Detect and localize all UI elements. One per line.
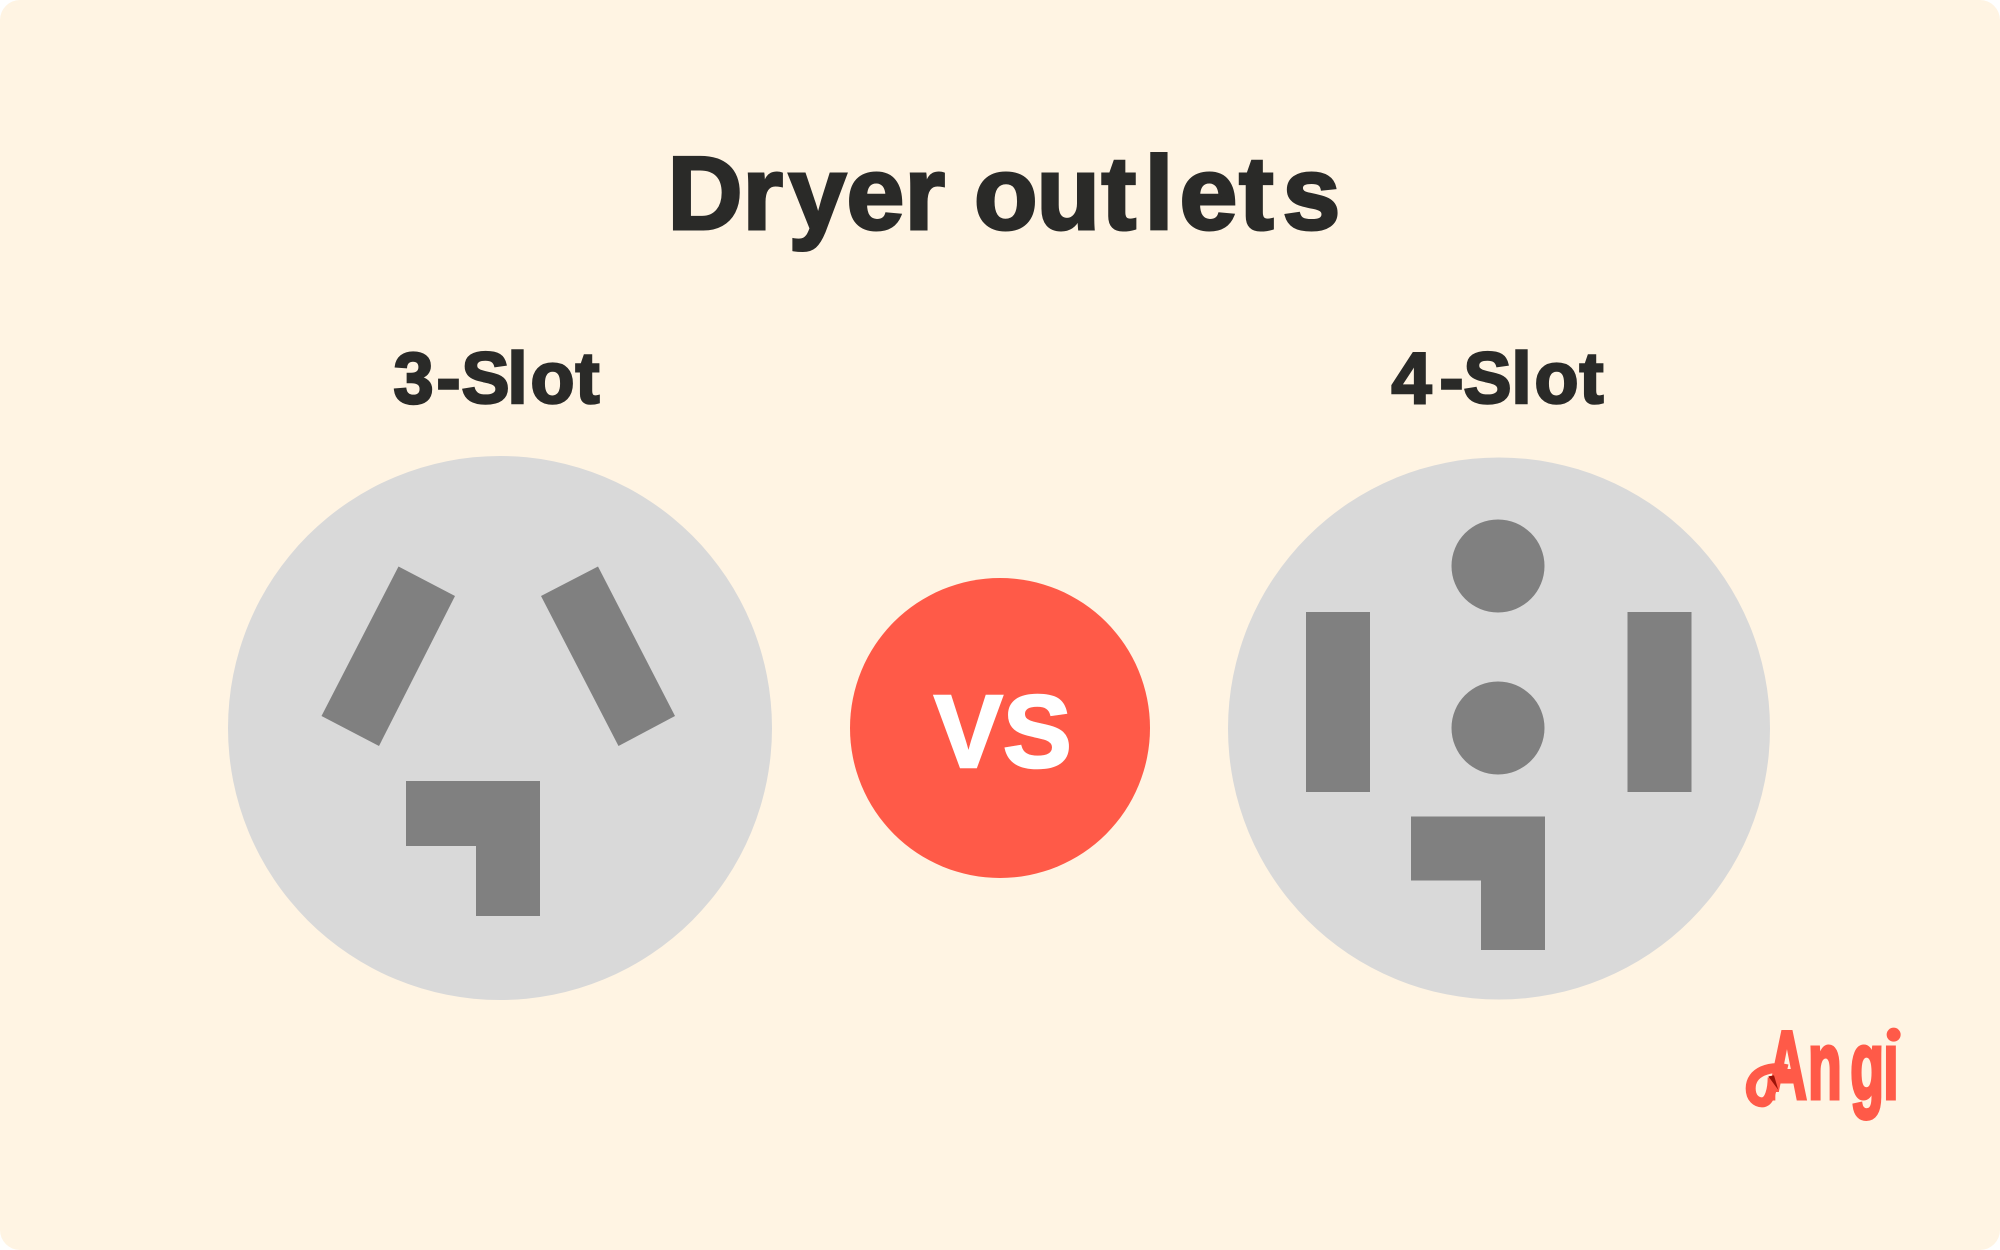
logo swash bbox=[1751, 1020, 1904, 1102]
left angled slot bbox=[322, 566, 455, 746]
right vertical slot bbox=[1628, 612, 1692, 792]
title: Dryer outlets bbox=[668, 136, 1340, 252]
logo: Angi bbox=[1751, 1011, 1904, 1119]
outlet: 4-slot bbox=[1228, 458, 1770, 1000]
outlet face: 3-slot bbox=[228, 456, 772, 1000]
logo wordmark: Angi bbox=[1767, 1011, 1899, 1119]
heading: 3-Slot: 3-Slot bbox=[394, 339, 600, 419]
left vertical slot bbox=[1306, 612, 1370, 792]
outlet face: 4-slot bbox=[1228, 458, 1770, 1000]
VS circle bbox=[850, 578, 1150, 878]
top round slot bbox=[1452, 520, 1544, 612]
heading: 4-Slot: 4-Slot bbox=[1392, 339, 1604, 419]
VS label: VS bbox=[934, 674, 1072, 789]
outlet: 3-slot bbox=[228, 456, 772, 1000]
L-shaped ground slot bbox=[1411, 816, 1545, 950]
right angled slot bbox=[541, 566, 675, 746]
VS badge bbox=[850, 578, 1150, 878]
middle round slot bbox=[1452, 682, 1544, 774]
L-shaped ground slot bbox=[406, 781, 540, 916]
